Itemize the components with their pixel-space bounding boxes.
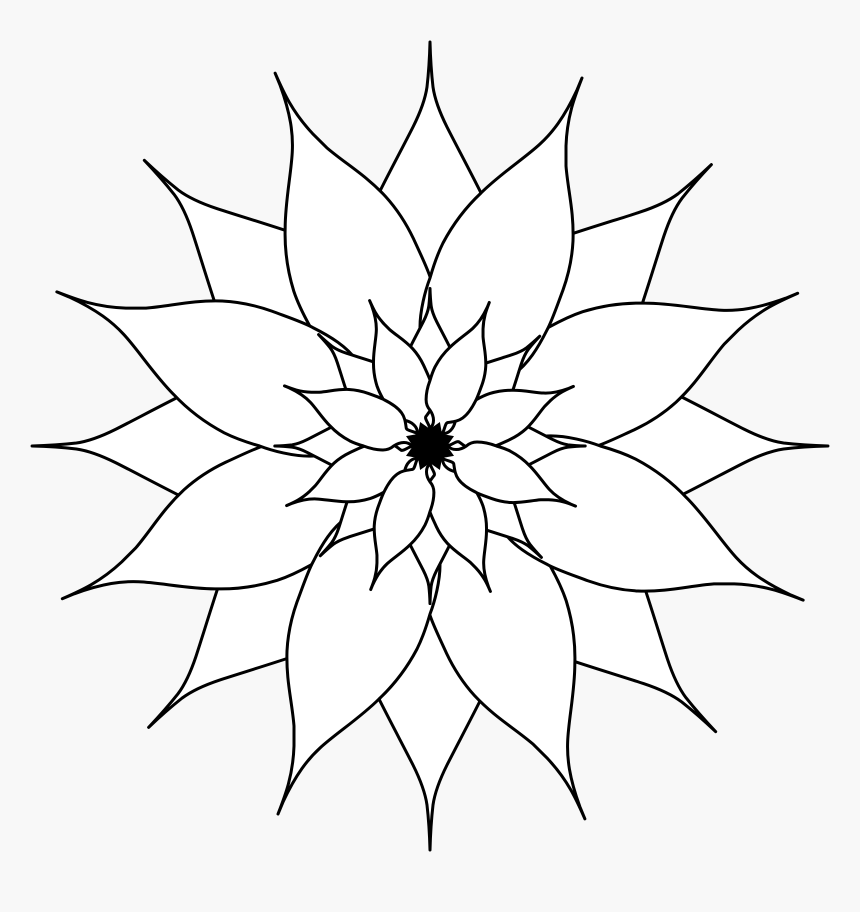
inner large petals [284, 301, 576, 591]
black flower centre [406, 422, 454, 470]
outer large petals [57, 73, 803, 819]
inner narrow petals [275, 288, 585, 604]
inner flower layer [275, 288, 585, 604]
